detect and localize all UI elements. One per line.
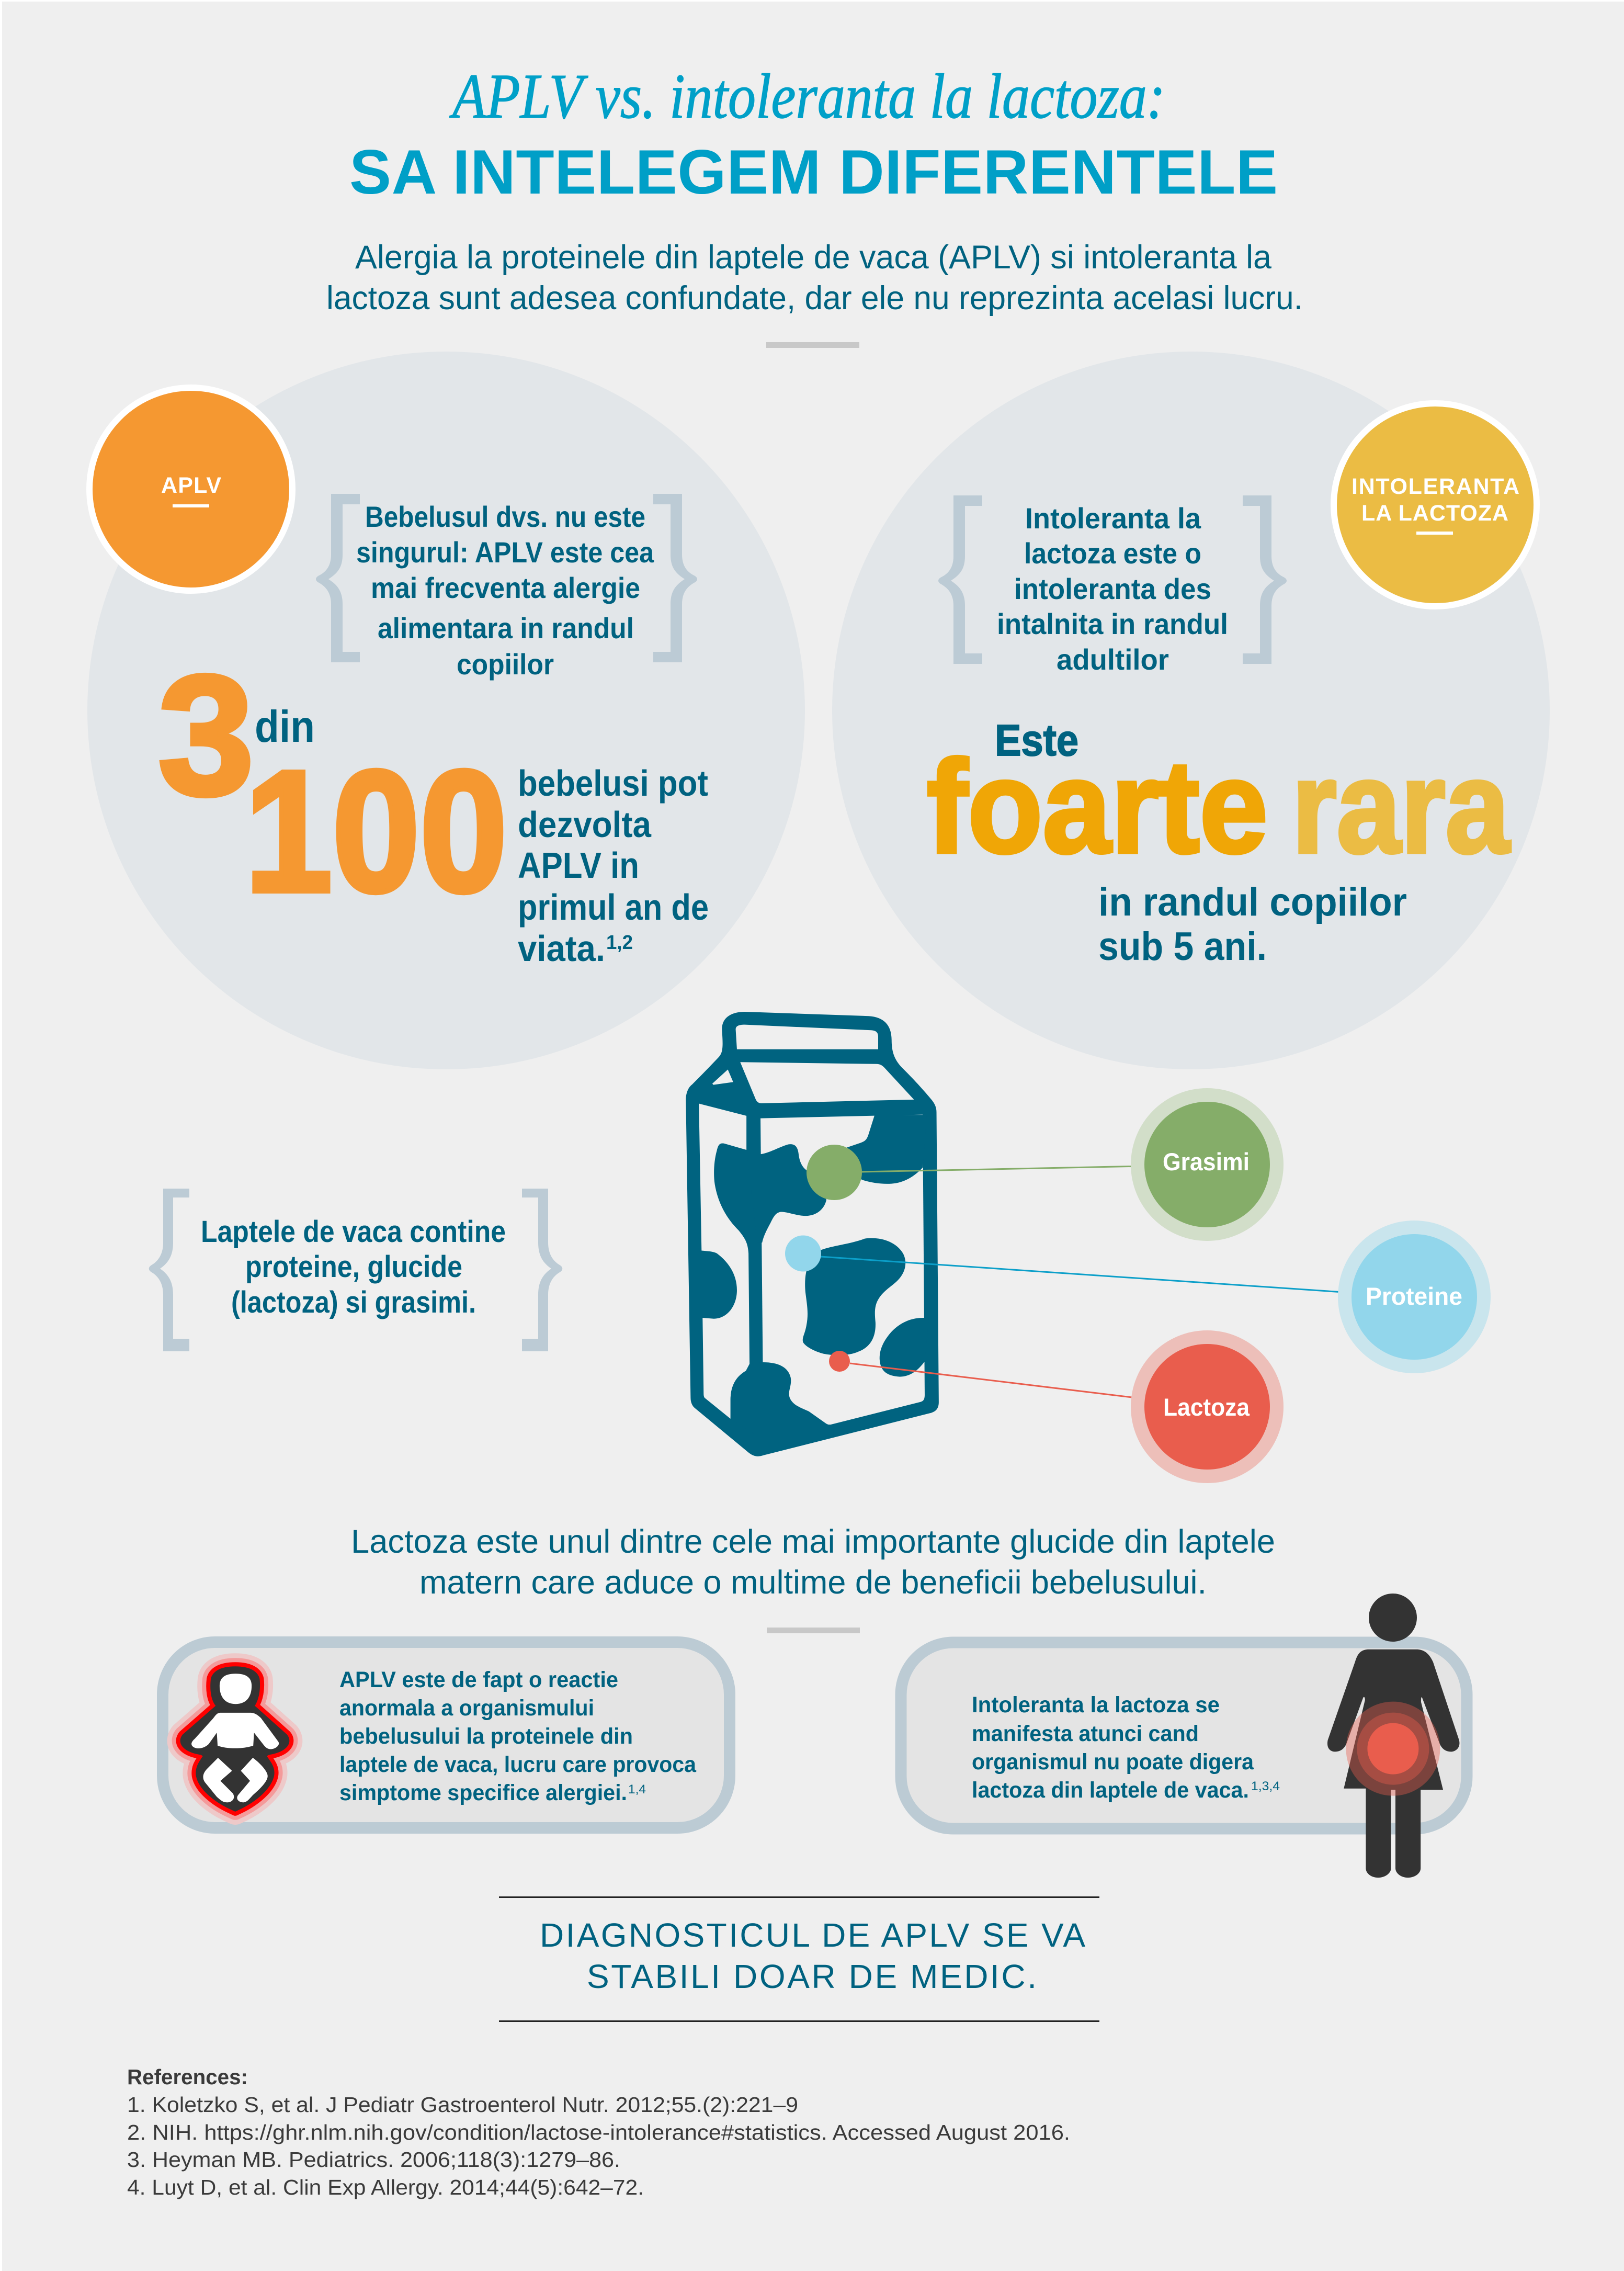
text: lactose benefit [351,1523,1275,1601]
text: stat description: viata. [518,928,605,969]
node: Lactoza [1131,1330,1284,1483]
text: lactose intolerance explanation: manifesta atunci cand [972,1721,1199,1746]
text: lactose intolerance explanation: Intoleranta la lactoza se [972,1692,1220,1718]
text: APLV explanation: 1,4 [628,1782,646,1797]
title: script line: APLV vs. intoleranta la lactoza: [449,61,1165,132]
text: intolerance in adults [997,502,1228,676]
text: intolerance in adults: intalnita in randul [997,607,1228,640]
text: lactose intolerance explanation: 1,3,4 [1251,1779,1280,1793]
text: APLV frequency: singurul: APLV este cea [356,536,654,569]
icon: milk carton [686,1012,939,1456]
text: lactose benefit: Lactoza este unul dintre cele mai importante glucide din laptele [351,1523,1275,1560]
node: Proteine: Proteine [1366,1282,1462,1310]
text: APLV frequency: copiilor [457,648,554,681]
text: intolerance in adults: Intoleranta la [1025,502,1201,535]
stat: 3 din 100 [158,640,507,928]
references: 3. Heyman MB. Pediatrics. 2006;118(3):1279–86. [127,2148,620,2172]
text: APLV frequency [356,500,654,681]
stat: este foarte rara: foarte [927,733,1268,880]
text: stat description: bebelusi pot [518,763,708,804]
badge: intoleranta la lactoza: INTOLERANTA [1352,474,1519,499]
callout: diagnosis: DIAGNOSTICUL DE APLV SE VA [540,1916,1085,1954]
text: intolerance in adults: adultilor [1057,643,1169,676]
node: Proteine [1338,1221,1491,1373]
bracket: milk composition right [522,1189,562,1351]
text: APLV explanation: APLV este de fapt o reactie [339,1667,618,1692]
text: milk composition: Laptele de vaca contine [201,1215,506,1249]
icon: baby with red glow [180,1666,289,1812]
stat: este foarte rara: rara [1292,733,1511,880]
bracket: left [938,495,982,664]
text: in children under 5: sub 5 ani. [1098,924,1267,969]
text: milk composition: (lactoza) si grasimi. [231,1285,476,1319]
stat: este foarte rara [927,716,1511,880]
references: References: [127,2065,248,2089]
text: in children under 5 [1098,880,1407,969]
node: Grasimi: Grasimi [1163,1148,1250,1176]
text: stat description: APLV in [518,845,639,886]
references [127,2065,1070,2199]
badge: APLV: APLV [161,473,221,498]
bracket: right [653,494,697,662]
title: main heading: SA INTELEGEM DIFERENTELE [349,137,1278,207]
text: stat description: dezvolta [518,804,652,845]
panel: intoleranta la lactoza [832,352,1550,1069]
bracket: right [1243,495,1287,664]
badge: intoleranta la lactoza: LA LACTOZA [1361,501,1508,526]
icon: woman with abdominal pain [1327,1594,1459,1878]
text: lactose intolerance explanation: organismul nu poate digera [972,1749,1254,1775]
intro text: lactoza sunt adesea confundate, dar ele nu reprezinta acelasi lucru. [326,280,1303,317]
text: intolerance in adults: lactoza este o [1024,537,1201,570]
text: intolerance in adults: intoleranta des [1014,572,1211,605]
node: Grasimi [1131,1088,1284,1241]
text: stat description: primul an de [518,887,709,928]
references: 2. NIH. https://ghr.nlm.nih.gov/condition/lactose-intolerance#statistics. Accessed August 2016. [127,2120,1070,2144]
intro text: Alergia la proteinele din laptele de vaca (APLV) si intoleranta la [355,239,1272,276]
text: stat description [518,763,709,969]
references: 1. Koletzko S, et al. J Pediatr Gastroenterol Nutr. 2012;55.(2):221–9 [127,2093,798,2117]
panel: lactose intolerance explanation [901,1594,1467,1878]
text: milk composition: proteine, glucide [245,1250,462,1284]
badge: intoleranta la lactoza [1334,403,1537,606]
text: lactose intolerance explanation: lactoza din laptele de vaca. [972,1778,1249,1803]
text: lactose intolerance explanation [972,1692,1280,1803]
badge: APLV [89,388,292,591]
intro text [326,239,1303,317]
text: APLV frequency: Bebelusul dvs. nu este [365,500,645,533]
bracket: milk composition left [149,1189,189,1351]
text: APLV frequency: alimentara in randul [378,612,634,645]
callout: diagnosis [499,1896,1099,2022]
panel: APLV [87,352,805,1069]
callout: diagnosis: STABILI DOAR DE MEDIC. [587,1958,1037,1995]
panel: APLV explanation [163,1642,730,1828]
text: APLV explanation: simptome specifice alergiei. [339,1780,627,1805]
stat: 3 din 100: 100 [245,735,507,928]
text: stat description: 1,2 [606,932,633,954]
stat: este foarte rara: Este [995,716,1078,765]
text: APLV explanation: anormala a organismului [339,1696,594,1721]
text: lactose benefit: matern care aduce o multime de beneficii bebelusului. [419,1564,1207,1601]
stat: 3 din 100: din [255,702,315,752]
chart: connector lines and dots [785,1145,1351,1399]
stat: 3 din 100: 3 [158,640,254,831]
text: in children under 5: in randul copiilor [1098,880,1407,924]
text: APLV explanation: bebelusului la proteinele din [339,1724,633,1749]
node: Lactoza: Lactoza [1163,1393,1250,1421]
text: milk composition [201,1215,506,1319]
bracket: left [316,494,360,662]
text: APLV explanation [339,1667,697,1805]
references: 4. Luyt D, et al. Clin Exp Allergy. 2014;44(5):642–72. [127,2175,644,2199]
text: APLV explanation: laptele de vaca, lucru care provoca [339,1752,697,1777]
text: APLV frequency: mai frecventa alergie [371,571,640,604]
